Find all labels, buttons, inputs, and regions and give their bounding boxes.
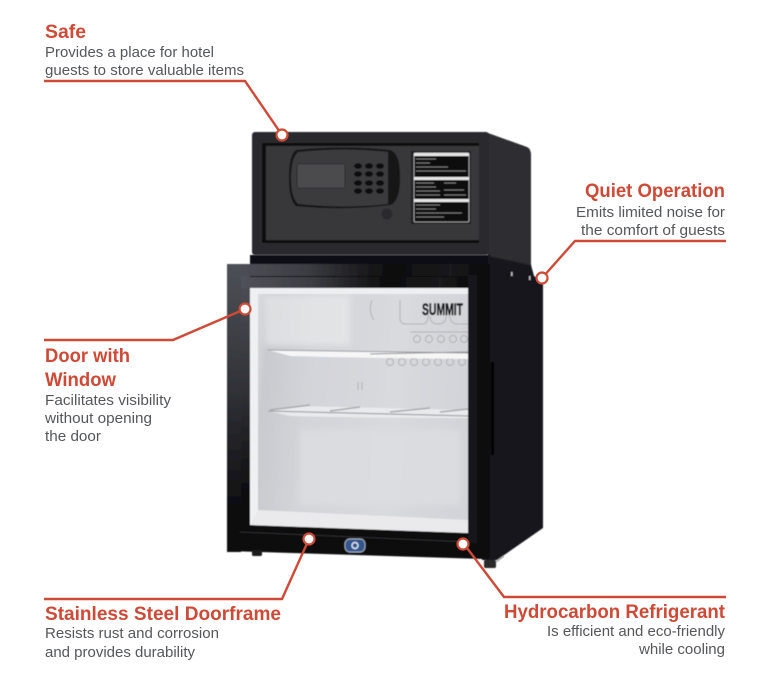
text: Stainless Steel Doorframe description: Resists rust and corrosion (45, 626, 219, 642)
heading: Door with Window: Door with (45, 345, 130, 367)
leader line: Stainless Steel Doorframe (44, 539, 309, 599)
callout: Door with Window (44, 304, 250, 445)
text: Safe description: guests to store valuable items (45, 63, 244, 79)
text: Door with Window description: without opening (44, 411, 152, 427)
text: Hydrocarbon Refrigerant description: while cooling (638, 642, 725, 658)
text: Safe description (45, 45, 244, 79)
leader line: Quiet Operation (542, 241, 726, 278)
callout: Stainless Steel Doorframe (44, 534, 314, 661)
leader line: Door with Window (44, 309, 245, 340)
safe front body (252, 132, 489, 255)
callout: Hydrocarbon Refrigerant (458, 538, 726, 658)
text: Stainless Steel Doorframe description (45, 626, 219, 661)
fridge power button (345, 539, 365, 552)
fridge bottom rail (240, 532, 469, 542)
refrigerator (227, 255, 543, 568)
safe side panel (488, 133, 531, 266)
heading: Quiet Operation: Quiet Operation (585, 180, 725, 202)
heading: Door with Window (45, 345, 130, 391)
callout: Quiet Operation (536, 180, 726, 284)
text: Quiet Operation description: the comfort of guests (581, 223, 725, 239)
text: Hydrocarbon Refrigerant description: Is efficient and eco-friendly (547, 624, 726, 640)
text: Hydrocarbon Refrigerant description (547, 624, 726, 658)
leader line: Hydrocarbon Refrigerant (464, 544, 726, 597)
fridge top gap (250, 255, 490, 265)
heading: Hydrocarbon Refrigerant: Hydrocarbon Refrigerant (504, 601, 725, 623)
text: Quiet Operation description (576, 205, 725, 239)
fridge door frame (227, 264, 490, 559)
heading: Safe: Safe (45, 21, 86, 43)
marker: Hydrocarbon Refrigerant (458, 538, 468, 550)
hinge details (511, 272, 512, 276)
fridge coil pattern (358, 300, 468, 390)
marker: Stainless Steel Doorframe (304, 534, 314, 544)
product photo: refrigerator with safe (227, 132, 543, 568)
marker: Quiet Operation (536, 272, 548, 284)
marker: Safe (276, 130, 288, 140)
text: Quiet Operation description: Emits limited noise for (576, 205, 725, 221)
safe recess (262, 143, 479, 243)
heading: Door with Window: Window (45, 369, 117, 391)
safe (252, 132, 531, 266)
text: Door with Window description: Facilitates visibility (45, 393, 172, 409)
marker: Door with Window (240, 304, 250, 314)
heading: Stainless Steel Doorframe: Stainless Steel Doorframe (45, 603, 281, 625)
SUMMIT logo: SUMMIT (422, 300, 463, 319)
safe instruction label (411, 151, 471, 224)
fridge feet (252, 550, 262, 556)
leader line: Safe (44, 81, 282, 135)
text: Safe description: Provides a place for hotel (45, 45, 214, 61)
fridge window interior (250, 288, 468, 533)
text: Door with Window description: the door (45, 429, 101, 445)
text: Stainless Steel Doorframe description: and provides durability (45, 645, 196, 661)
fridge shelf upper (268, 350, 468, 359)
fridge shelf lower (268, 406, 468, 418)
callout: Safe (44, 21, 288, 140)
safe lock button (382, 208, 392, 220)
safe keypad housing (289, 148, 400, 208)
fridge side (482, 256, 543, 560)
text: Door with Window description (44, 393, 172, 445)
